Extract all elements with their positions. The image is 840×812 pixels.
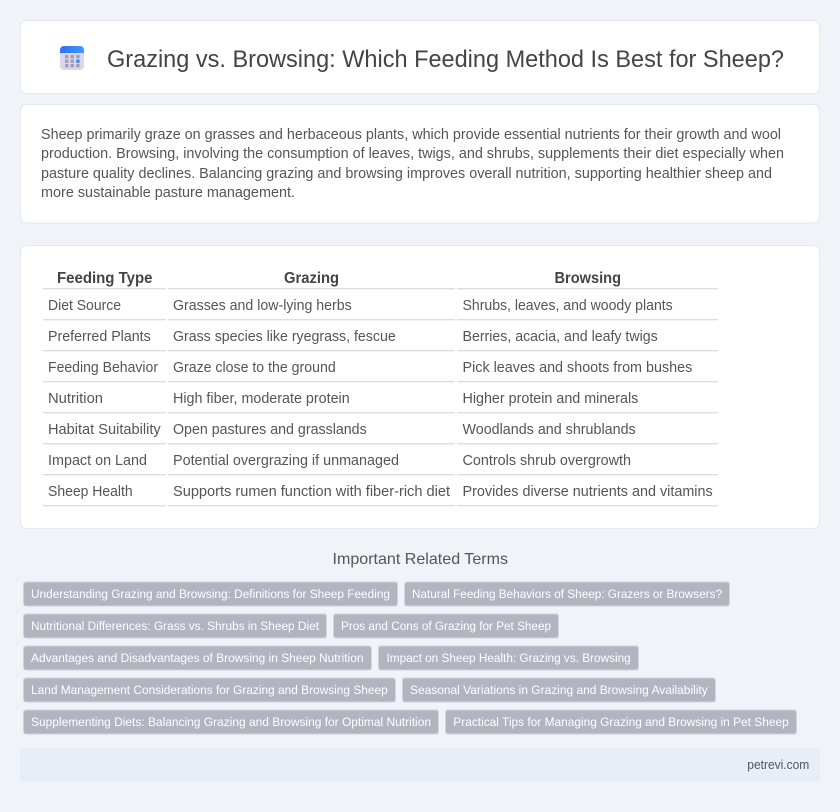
table row: diet source: Shrubs, leaves, and woody plants: [462, 298, 673, 314]
panel: comparison table: [20, 246, 820, 528]
table row: nutrition: High fiber, moderate protein: [173, 391, 350, 407]
tag: [334, 614, 558, 638]
table row: preferred plants: Grass species like ryegrass, fescue: [173, 329, 396, 345]
table row: impact on land: Controls shrub overgrowth: [462, 453, 631, 469]
table row: diet source: [43, 298, 718, 320]
table row: impact on land: [43, 453, 718, 475]
tag: [24, 614, 326, 638]
table row: nutrition: Higher protein and minerals: [462, 391, 638, 407]
table row: sheep health: [43, 484, 718, 506]
table row: impact on land: Impact on Land: [48, 453, 147, 469]
tag: Supplementing Diets: Balancing Grazing and Browsing for Optimal Nutrition: [31, 715, 431, 729]
table row: feeding behavior: Feeding Behavior: [48, 360, 158, 376]
tag: Impact on Sheep Health: Grazing vs. Browsing: [386, 651, 631, 665]
table row: preferred plants: Berries, acacia, and leafy twigs: [462, 329, 658, 345]
tag: [24, 646, 372, 670]
table row: nutrition: Nutrition: [48, 391, 103, 407]
footer: [20, 748, 820, 782]
title: Grazing vs. Browsing: Which Feeding Method Is Best for Sheep?: [107, 46, 784, 73]
tag: Advantages and Disadvantages of Browsing in Sheep Nutrition: [31, 651, 364, 665]
tag: Understanding Grazing and Browsing: Definitions for Sheep Feeding: [31, 587, 390, 601]
tag: Land Management Considerations for Grazing and Browsing Sheep: [31, 683, 388, 697]
table row: sheep health: Sheep Health: [48, 484, 133, 500]
table row: nutrition: [43, 391, 718, 413]
tag: [404, 582, 730, 606]
table row: preferred plants: Preferred Plants: [48, 329, 151, 345]
table row: feeding behavior: [43, 360, 718, 382]
panel: header: [20, 20, 820, 94]
table row: diet source: Diet Source: [48, 298, 121, 314]
table row: habitat suitability: Woodlands and shrublands: [462, 422, 636, 438]
text block: introduction paragraph: [41, 127, 784, 201]
table row: impact on land: Potential overgrazing if unmanaged: [173, 453, 399, 469]
table row: preferred plants: [43, 329, 718, 351]
tag: [446, 710, 796, 734]
tag: Pros and Cons of Grazing for Pet Sheep: [341, 619, 551, 633]
table header row: Feeding Type: [57, 270, 153, 287]
table header row: [43, 270, 718, 289]
table row: diet source: Grasses and low-lying herbs: [173, 298, 352, 314]
table header row: Grazing: [284, 270, 339, 287]
text block: introduction paragraph: more sustainable pasture management.: [41, 185, 295, 201]
icon: calendar: [60, 46, 84, 70]
tag: Seasonal Variations in Grazing and Browsing Availability: [410, 683, 708, 697]
table row: habitat suitability: Open pastures and grasslands: [173, 422, 367, 438]
table row: feeding behavior: Graze close to the ground: [173, 360, 336, 376]
table row: feeding behavior: Pick leaves and shoots from bushes: [462, 360, 692, 376]
panel: introduction: [20, 104, 820, 223]
footer source text: petrevi.com: [747, 757, 809, 772]
tag: [402, 678, 716, 702]
tag: [378, 646, 638, 670]
tag: [24, 678, 396, 702]
table row: sheep health: Provides diverse nutrients and vitamins: [462, 484, 713, 500]
text block: introduction paragraph: production. Browsing, involving the consumption of leaves, twigs, and shrubs, supplements their diet especially when: [41, 146, 784, 162]
tag: Nutritional Differences: Grass vs. Shrubs in Sheep Diet: [31, 619, 320, 633]
table header row: Browsing: [554, 270, 621, 287]
tag: [24, 582, 398, 606]
table row: habitat suitability: Habitat Suitability: [48, 422, 161, 438]
table row: sheep health: Supports rumen function with fiber-rich diet: [173, 484, 450, 500]
tag: Practical Tips for Managing Grazing and Browsing in Pet Sheep: [453, 715, 789, 729]
text block: introduction paragraph: Sheep primarily graze on grasses and herbaceous plants, which provide essential nutrients for their growth and wool: [41, 127, 781, 143]
tag: [24, 710, 438, 734]
heading: important related terms: Important Related Terms: [332, 551, 508, 568]
tag: Natural Feeding Behaviors of Sheep: Grazers or Browsers?: [412, 587, 722, 601]
tag list: related terms: [24, 582, 796, 734]
table row: habitat suitability: [43, 422, 718, 444]
text block: introduction paragraph: pasture quality declines. Balancing grazing and browsing improves overall nutrition, supporting healthier sheep and: [41, 166, 772, 182]
